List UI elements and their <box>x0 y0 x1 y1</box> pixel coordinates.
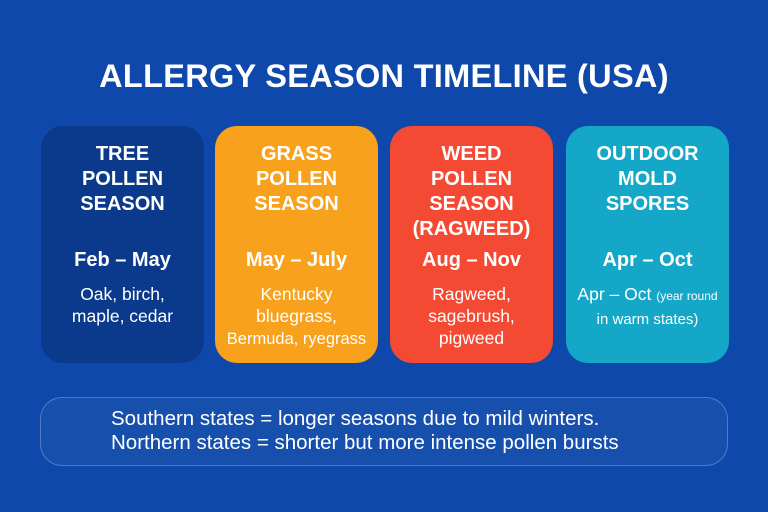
heading: mold: SPORES <box>606 193 689 215</box>
heading: tree: SEASON <box>80 193 165 215</box>
heading: weed <box>413 143 530 240</box>
heading: mold: OUTDOOR <box>596 143 699 165</box>
note box: Northern states = shorter but more intense pollen bursts <box>111 431 619 454</box>
body: mold: in warm states) <box>597 311 698 328</box>
body: grass: Kentucky <box>260 284 332 304</box>
body: tree: Oak, birch, <box>80 284 165 304</box>
panel: weed pollen <box>390 126 553 363</box>
body: tree: maple, cedar <box>72 306 173 326</box>
heading: weed: SEASON <box>429 193 514 215</box>
body: grass: bluegrass, <box>256 306 337 326</box>
panel: mold spores <box>566 126 729 363</box>
body: grass: Bermuda, ryegrass <box>227 330 366 348</box>
heading: grass <box>254 143 339 215</box>
date: weed: Aug – Nov <box>422 249 521 271</box>
heading: tree: TREE <box>96 143 149 165</box>
note box <box>40 397 728 466</box>
body: weed: pigweed <box>439 328 504 348</box>
body: tree <box>72 284 173 326</box>
heading: grass: GRASS <box>261 143 332 165</box>
note box: Southern states = longer seasons due to mild winters. <box>111 407 599 430</box>
body: grass <box>227 284 366 348</box>
date: mold: Apr – Oct <box>602 249 693 271</box>
heading: weed: POLLEN <box>431 168 512 190</box>
body: weed: Ragweed, <box>432 284 511 304</box>
heading: mold <box>596 143 699 215</box>
title: ALLERGY SEASON TIMELINE (USA) <box>99 58 669 94</box>
heading: tree <box>80 143 165 215</box>
heading: tree: POLLEN <box>82 168 163 190</box>
heading: weed: (RAGWEED) <box>413 218 530 240</box>
body: weed <box>428 284 515 348</box>
body: mold <box>577 284 718 328</box>
date: tree: Feb – May <box>74 249 171 271</box>
body: mold: Apr – Oct (year round <box>577 284 718 304</box>
heading: weed: WEED <box>442 143 502 165</box>
heading: grass: SEASON <box>254 193 339 215</box>
heading: grass: POLLEN <box>256 168 337 190</box>
panel: tree pollen <box>41 126 204 363</box>
panel: grass pollen <box>215 126 378 363</box>
heading: mold: MOLD <box>618 168 677 190</box>
date: grass: May – July <box>246 249 347 271</box>
body: weed: sagebrush, <box>428 306 515 326</box>
